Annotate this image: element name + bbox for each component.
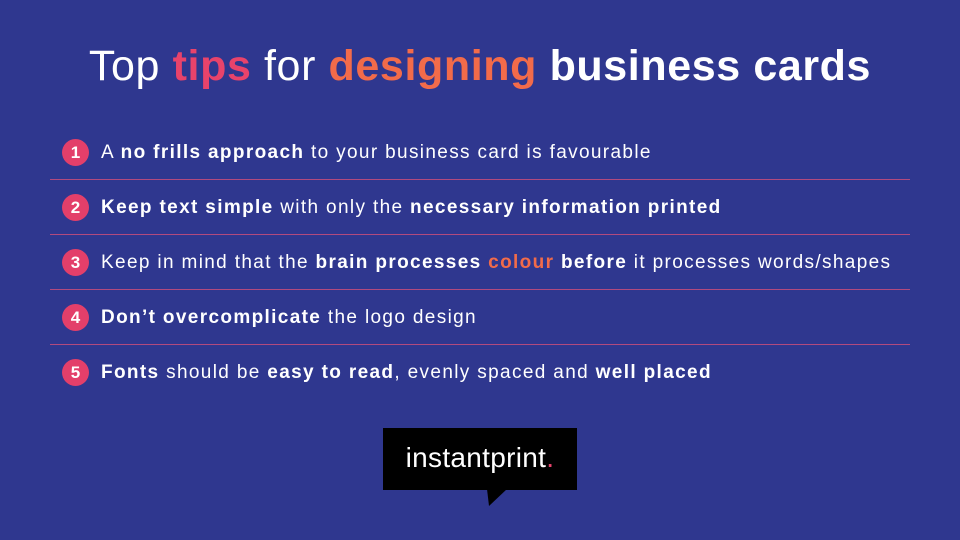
tip 3: Keep in mind that the brain processes colour before it processes words/shapes [101,252,891,273]
tip 5: 5 [71,363,80,382]
tip 3: 3 [71,253,80,272]
tip 1: A no frills approach to your business card is favourable [101,142,652,163]
tip 4: Don’t overcomplicate the logo design [101,307,477,328]
tip 2: Keep text simple with only the necessary information printed [101,197,722,218]
tip 1: 1 [71,143,80,162]
title: Top tips for designing business cards [89,42,871,90]
logo [383,428,577,506]
logo: instantprint. [406,442,554,473]
tip 2: 2 [71,198,80,217]
tip 5: Fonts should be easy to read, evenly spaced and well placed [101,362,712,383]
tip 4: 4 [71,308,80,327]
